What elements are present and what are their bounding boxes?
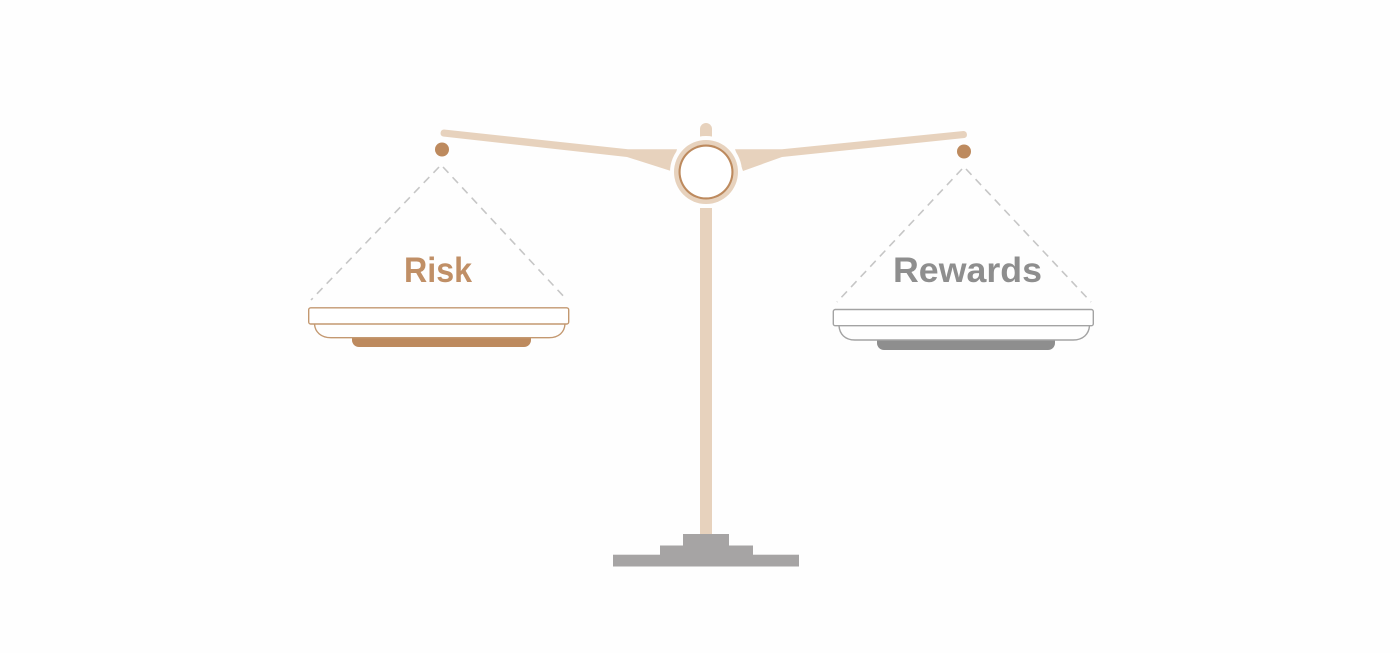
left dashed strings — [311, 167, 567, 300]
label: Rewards: Rewards — [893, 251, 1042, 290]
right dashed strings — [837, 169, 1091, 302]
right hanging dot — [957, 144, 971, 158]
scale post — [700, 123, 712, 536]
central pivot ring — [670, 136, 742, 208]
left pan — [309, 308, 569, 347]
scale beam — [441, 130, 967, 171]
label: Risk: Risk — [404, 251, 472, 290]
scale base — [613, 534, 799, 566]
right pan — [833, 310, 1093, 350]
left hanging dot — [435, 142, 449, 156]
